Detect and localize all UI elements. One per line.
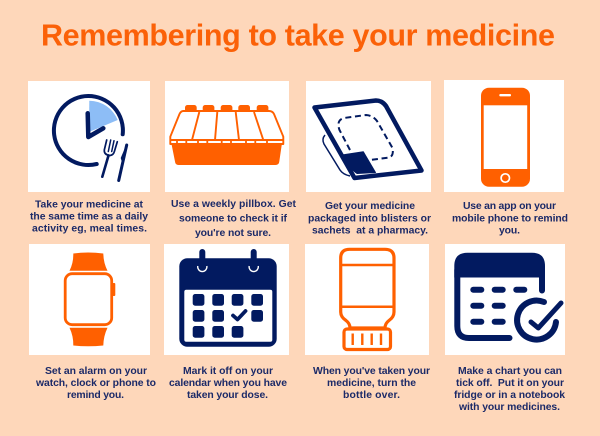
- caption: Make a chart you can: [458, 366, 562, 377]
- caption: When you've taken your: [313, 366, 430, 377]
- caption: [169, 366, 287, 401]
- icon: mobile phone: [481, 88, 530, 187]
- caption: Mark it off on your: [183, 366, 273, 377]
- caption: [35, 366, 156, 401]
- icon: clock with fork and knife: [54, 96, 127, 180]
- caption: [308, 201, 431, 237]
- panel: turn bottle over: [305, 244, 430, 401]
- caption: tick off. Put it on your: [456, 378, 564, 389]
- caption: Use a weekly pillbox. Get: [171, 199, 297, 210]
- caption: Set an alarm on your: [45, 366, 147, 377]
- caption: taken your dose.: [187, 390, 268, 401]
- panel: calendar: [164, 244, 289, 401]
- panel: same time as daily activity: [28, 81, 150, 234]
- title: Remembering to take your medicine: [41, 18, 555, 52]
- caption: [171, 199, 297, 239]
- icon: upside-down bottle: [341, 249, 394, 350]
- caption: fridge or in a notebook: [454, 390, 565, 401]
- panel: watch alarm: [29, 244, 156, 401]
- caption: packaged into blisters or: [308, 214, 431, 225]
- icon: pillbox: [170, 105, 283, 165]
- caption: medicine, turn the: [327, 378, 416, 389]
- caption: the same time as a daily: [30, 212, 148, 222]
- caption: you.: [499, 226, 520, 237]
- caption: Use an app on your: [463, 201, 556, 212]
- icon: blister pack: [314, 100, 422, 178]
- caption: [454, 366, 565, 413]
- caption: activity eg, meal times.: [32, 224, 147, 234]
- caption: remind you.: [67, 390, 124, 401]
- caption: you're not sure.: [195, 228, 271, 239]
- caption: [313, 366, 430, 401]
- caption: calendar when you have: [169, 378, 287, 389]
- panel: blister packs: [306, 81, 431, 237]
- caption: bottle over.: [343, 390, 400, 401]
- icon: smart watch: [65, 252, 115, 346]
- caption: someone to check it if: [179, 214, 288, 225]
- caption: mobile phone to remind: [452, 214, 568, 225]
- caption: [452, 201, 568, 237]
- caption: [30, 200, 148, 234]
- caption: Take your medicine at: [35, 200, 144, 210]
- caption: sachets at a pharmacy.: [312, 226, 428, 237]
- panel: phone app: [444, 80, 568, 237]
- icon: chart with tick: [454, 253, 561, 340]
- panel: tick-off chart: [445, 244, 565, 413]
- icon: calendar with tick: [179, 252, 277, 347]
- panel: weekly pillbox: [165, 81, 297, 239]
- caption: watch, clock or phone to: [35, 378, 156, 389]
- caption: with your medicines.: [458, 402, 560, 413]
- caption: Get your medicine: [325, 201, 415, 212]
